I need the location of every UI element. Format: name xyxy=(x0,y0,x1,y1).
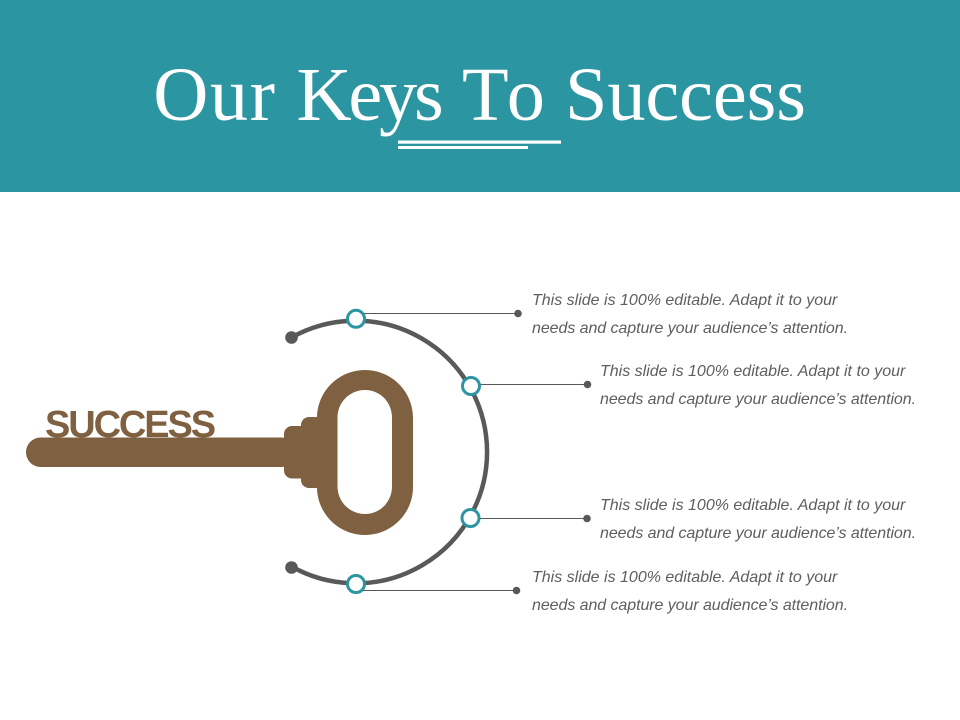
text block 2: This slide is 100% editable. Adapt it to your xyxy=(600,363,905,380)
title: Keys xyxy=(296,52,441,137)
arc xyxy=(285,321,487,583)
connector 1 xyxy=(362,310,522,317)
text block 2: needs and capture your audience’s attention. xyxy=(600,391,916,408)
text block 1: needs and capture your audience’s attention. xyxy=(532,320,848,337)
node 4 xyxy=(348,576,364,592)
connector 4 xyxy=(362,587,520,594)
title: To xyxy=(462,52,548,137)
title xyxy=(153,52,806,137)
text block 3: needs and capture your audience’s attention. xyxy=(600,525,916,542)
title: Success xyxy=(565,52,806,137)
connector 3 xyxy=(478,515,591,522)
text block 1 xyxy=(532,292,848,337)
key xyxy=(26,370,413,535)
title underline xyxy=(398,140,561,149)
text block 2 xyxy=(600,363,916,408)
text block 3: This slide is 100% editable. Adapt it to your xyxy=(600,497,905,514)
text block 4 xyxy=(532,569,848,614)
title: Our xyxy=(153,52,277,137)
header band xyxy=(0,0,960,192)
node 3 xyxy=(462,510,479,526)
word: SUCCESS: SUCCESS xyxy=(45,404,215,446)
text block 4: This slide is 100% editable. Adapt it to your xyxy=(532,569,837,586)
node 2 xyxy=(462,378,480,394)
text block 4: needs and capture your audience’s attention. xyxy=(532,597,848,614)
connector 2 xyxy=(478,381,591,388)
text block 3 xyxy=(600,497,916,542)
node 1 xyxy=(348,310,364,327)
text block 1: This slide is 100% editable. Adapt it to your xyxy=(532,292,837,309)
